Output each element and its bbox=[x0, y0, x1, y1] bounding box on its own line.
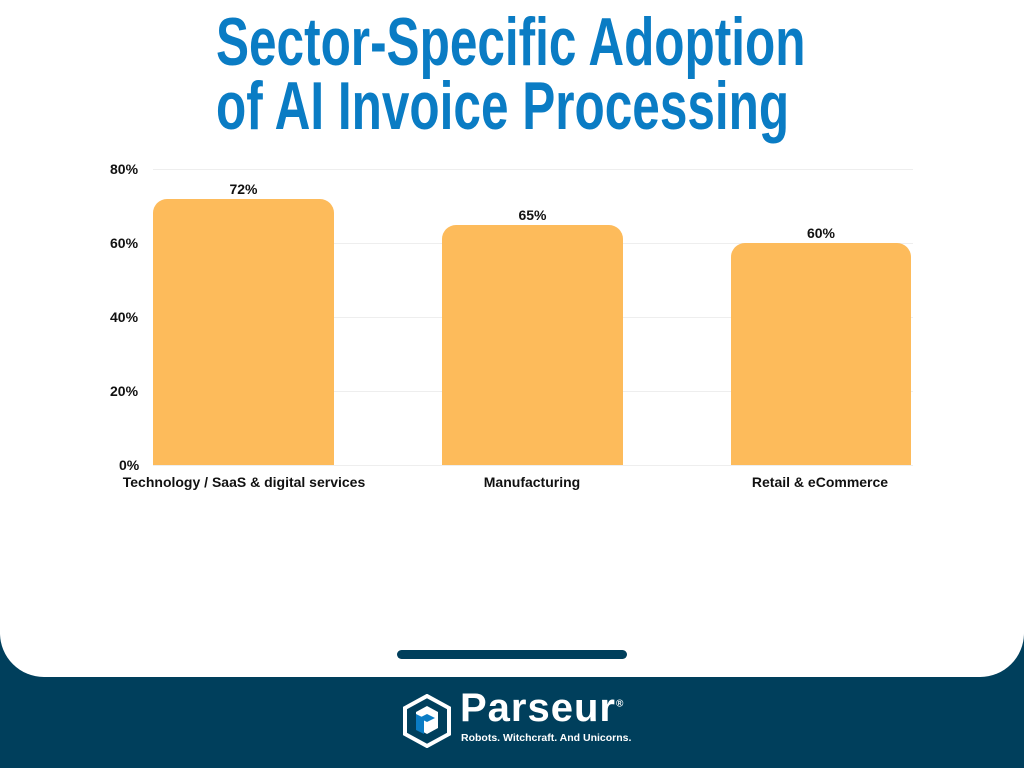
bar chart: 40% bbox=[110, 309, 138, 325]
bar chart: Manufacturing bbox=[484, 474, 580, 490]
title: Sector-Specific Adoption bbox=[216, 4, 806, 80]
logo bbox=[403, 686, 631, 748]
bar: technology bbox=[153, 199, 334, 465]
bar chart: 72% bbox=[229, 181, 258, 197]
bar chart bbox=[110, 161, 913, 490]
bar chart: 65% bbox=[518, 207, 547, 223]
logo: Robots. Witchcraft. And Unicorns. bbox=[461, 732, 631, 744]
pill indicator bbox=[397, 650, 627, 659]
bar chart: 0% bbox=[119, 457, 139, 473]
bar chart: Technology / SaaS & digital services bbox=[123, 474, 365, 490]
bar chart: 20% bbox=[110, 383, 138, 399]
icon: hexagon bbox=[403, 694, 451, 748]
title: of AI Invoice Processing bbox=[216, 68, 789, 144]
bar: manufacturing bbox=[442, 225, 623, 465]
bar chart: Retail & eCommerce bbox=[752, 474, 888, 490]
bar chart: 60% bbox=[807, 225, 835, 241]
logo: Parseur® bbox=[460, 686, 624, 730]
bar chart: 60% bbox=[110, 235, 138, 251]
bar chart: 80% bbox=[110, 161, 138, 177]
title bbox=[216, 4, 806, 144]
bar: retail bbox=[731, 243, 911, 465]
